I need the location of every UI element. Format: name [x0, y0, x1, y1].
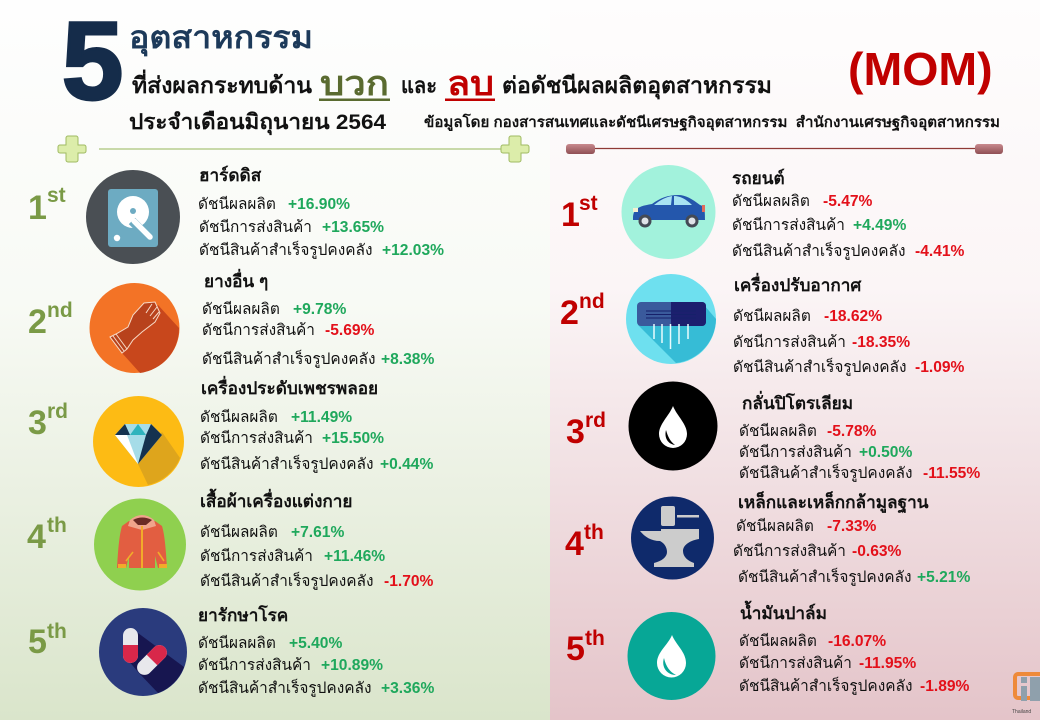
item: palm oil: [739, 600, 970, 696]
green divider: [58, 136, 529, 162]
item: automobile: ดัชนีสินค้าสำเร็จรูปคงคลัง: [732, 241, 905, 261]
item: hard disk: [198, 165, 444, 260]
item: automobile: ดัชนีการส่งสินค้า: [732, 217, 845, 234]
icon: air conditioner: [626, 274, 716, 364]
item: palm oil: ดัชนีการส่งสินค้า: [739, 655, 852, 672]
item: jewelry: ดัชนีการส่งสินค้า: [200, 430, 313, 447]
item: steel: -7.33%: [827, 518, 877, 535]
rank 2nd green: 2: [28, 303, 47, 341]
rank 1st red: st: [579, 192, 598, 215]
item: apparel: ดัชนีผลผลิต: [200, 524, 278, 541]
item: petroleum refining: ดัชนีผลผลิต: [739, 423, 817, 440]
item: apparel: +7.61%: [291, 524, 344, 541]
logo: office mark: Thailand: [1012, 709, 1031, 715]
rank 2nd red: [560, 290, 605, 332]
rank 3rd red: [566, 409, 606, 451]
icon: pills: [99, 608, 187, 696]
rank 3rd green: 3: [28, 404, 47, 442]
rank 1st green: [28, 184, 66, 227]
rank 5th green: [28, 620, 67, 661]
item: jewelry: เครื่องประดับเพชรพลอย: [201, 376, 378, 398]
item: other rubber: ดัชนีการส่งสินค้า: [202, 322, 315, 339]
item: air conditioner: -18.62%: [824, 308, 882, 325]
source note: ข้อมูลโดย กองสารสนเทศและดัชนีเศรษฐกิจอุตสาหกรรม สำนักงานเศรษฐกิจอุตสาหกรรม: [424, 113, 1000, 132]
item: other rubber: ยางอื่น ๆ: [204, 269, 268, 291]
item: palm oil: น้ำมันปาล์ม: [740, 600, 827, 623]
item: petroleum refining: +0.50%: [859, 444, 912, 461]
title: second line: บวก: [320, 65, 389, 103]
item: hard disk: ดัชนีผลผลิต: [198, 196, 276, 213]
icon: petroleum drop: [628, 382, 718, 470]
rank 3rd green: [28, 400, 68, 442]
item: other rubber: +8.38%: [381, 351, 434, 368]
rank 5th red: 5: [566, 630, 585, 668]
item: automobile: [732, 168, 965, 261]
item: palm oil: -11.95%: [859, 655, 916, 672]
icon: diamond: [93, 396, 184, 487]
item: hard disk: ฮาร์ดดิส: [199, 165, 262, 185]
item: steel: ดัชนีการส่งสินค้า: [733, 543, 846, 560]
item: palm oil: ดัชนีสินค้าสำเร็จรูปคงคลัง: [739, 676, 912, 696]
rank 4th red: [565, 521, 604, 563]
item: air conditioner: [733, 273, 965, 377]
icon: rubber glove: [90, 283, 180, 373]
title: industries: อุตสาหกรรม: [129, 20, 313, 57]
item: automobile: ดัชนีผลผลิต: [732, 193, 810, 210]
item: air conditioner: ดัชนีการส่งสินค้า: [733, 334, 846, 351]
rank 4th red: th: [584, 521, 604, 544]
MOM label: (MOM): [848, 43, 993, 95]
panel: negative industries: [560, 165, 980, 700]
icon: hard disk: [86, 170, 180, 264]
item: other rubber: +9.78%: [293, 301, 346, 318]
item: steel: ดัชนีผลผลิต: [736, 518, 814, 535]
rank 3rd green: rd: [47, 400, 68, 423]
icon: palm oil drop: [628, 612, 716, 700]
item: steel: +5.21%: [917, 569, 970, 586]
item: petroleum refining: [739, 391, 980, 483]
title: month: ประจำเดือนมิถุนายน 2564: [129, 110, 386, 136]
item: air conditioner: -1.09%: [915, 359, 965, 376]
rank 5th red: [566, 627, 605, 668]
red divider: [566, 144, 1003, 154]
item: automobile: +4.49%: [853, 217, 906, 234]
item: palm oil: -1.89%: [920, 678, 970, 695]
title: second line: [132, 65, 772, 103]
item: petroleum refining: -11.55%: [923, 465, 980, 482]
rank 2nd green: nd: [47, 299, 73, 322]
item: apparel: ดัชนีสินค้าสำเร็จรูปคงคลัง: [200, 571, 373, 591]
item: other rubber: [202, 269, 434, 369]
rank 2nd red: 2: [560, 294, 579, 332]
item: hard disk: +12.03%: [382, 242, 444, 259]
item: apparel: +11.46%: [324, 548, 385, 565]
item: steel: -0.63%: [852, 543, 902, 560]
item: petroleum refining: กลั่นปิโตรเลียม: [742, 391, 853, 413]
item: steel: ดัชนีสินค้าสำเร็จรูปคงคลัง: [738, 567, 911, 587]
item: pharmaceuticals: +5.40%: [289, 635, 342, 652]
rank 4th red: 4: [565, 525, 584, 563]
item: apparel: -1.70%: [384, 573, 434, 590]
item: jewelry: +0.44%: [380, 456, 433, 473]
item: apparel: [200, 488, 434, 591]
item: jewelry: +15.50%: [322, 430, 384, 447]
title: second line: ต่อดัชนีผลผลิตอุตสาหกรรม: [502, 73, 772, 100]
item: hard disk: +13.65%: [322, 219, 384, 236]
rank 3rd red: rd: [585, 409, 606, 432]
item: automobile: -5.47%: [823, 193, 873, 210]
title: second line: ลบ: [447, 65, 494, 103]
item: hard disk: ดัชนีสินค้าสำเร็จรูปคงคลัง: [199, 240, 372, 260]
item: apparel: ดัชนีการส่งสินค้า: [200, 548, 313, 565]
rank 5th green: th: [47, 620, 67, 643]
title: big number 5: 5: [62, 0, 123, 123]
item: petroleum refining: ดัชนีสินค้าสำเร็จรูปคงคลัง: [739, 463, 912, 483]
item: apparel: เสื้อผ้าเครื่องแต่งกาย: [200, 488, 352, 511]
item: jewelry: [200, 376, 433, 474]
item: jewelry: ดัชนีผลผลิต: [200, 409, 278, 426]
rank 4th green: th: [47, 514, 67, 537]
panel: positive industries: [27, 165, 444, 698]
rank 5th red: th: [585, 627, 605, 650]
rank 4th green: 4: [27, 518, 46, 556]
item: automobile: -4.41%: [915, 243, 965, 260]
item: pharmaceuticals: ดัชนีสินค้าสำเร็จรูปคงคลัง: [198, 678, 371, 698]
item: other rubber: -5.69%: [325, 322, 375, 339]
rank 5th green: 5: [28, 623, 47, 661]
item: hard disk: ดัชนีการส่งสินค้า: [199, 219, 312, 236]
item: hard disk: +16.90%: [288, 196, 350, 213]
item: pharmaceuticals: ยารักษาโรค: [198, 604, 288, 625]
item: palm oil: ดัชนีผลผลิต: [739, 633, 817, 650]
rank 1st green: 1: [28, 189, 47, 227]
icon: anvil: [631, 496, 714, 580]
item: pharmaceuticals: ดัชนีการส่งสินค้า: [198, 657, 311, 674]
rank 2nd red: nd: [579, 290, 605, 313]
rank 1st red: [561, 192, 598, 234]
item: pharmaceuticals: +10.89%: [321, 657, 383, 674]
icon: car: [622, 165, 716, 259]
item: petroleum refining: -5.78%: [827, 423, 877, 440]
title: second line: ที่ส่งผลกระทบด้าน: [132, 69, 313, 98]
item: air conditioner: ดัชนีผลผลิต: [733, 308, 811, 325]
rank 3rd red: 3: [566, 413, 585, 451]
icon: jacket: [94, 498, 186, 590]
item: air conditioner: เครื่องปรับอากาศ: [734, 273, 862, 295]
rank 1st green: st: [47, 184, 66, 207]
logo: office mark: [1012, 674, 1040, 715]
rank 4th green: [27, 514, 67, 556]
rank 1st red: 1: [561, 196, 580, 234]
item: pharmaceuticals: [198, 604, 434, 698]
item: pharmaceuticals: +3.36%: [381, 680, 434, 697]
item: jewelry: ดัชนีสินค้าสำเร็จรูปคงคลัง: [200, 454, 373, 474]
item: pharmaceuticals: ดัชนีผลผลิต: [198, 635, 276, 652]
item: steel: เหล็กและเหล็กกล้ามูลฐาน: [738, 490, 929, 514]
title: second line: และ: [401, 73, 437, 98]
item: automobile: รถยนต์: [732, 168, 785, 188]
item: jewelry: +11.49%: [291, 409, 352, 426]
item: air conditioner: ดัชนีสินค้าสำเร็จรูปคงคลัง: [733, 357, 906, 377]
item: steel: [733, 490, 970, 587]
item: other rubber: ดัชนีผลผลิต: [202, 301, 280, 318]
item: palm oil: -16.07%: [828, 633, 886, 650]
item: petroleum refining: ดัชนีการส่งสินค้า: [739, 444, 852, 461]
item: air conditioner: -18.35%: [852, 334, 910, 351]
rank 2nd green: [28, 299, 73, 341]
item: other rubber: ดัชนีสินค้าสำเร็จรูปคงคลัง: [202, 349, 375, 369]
